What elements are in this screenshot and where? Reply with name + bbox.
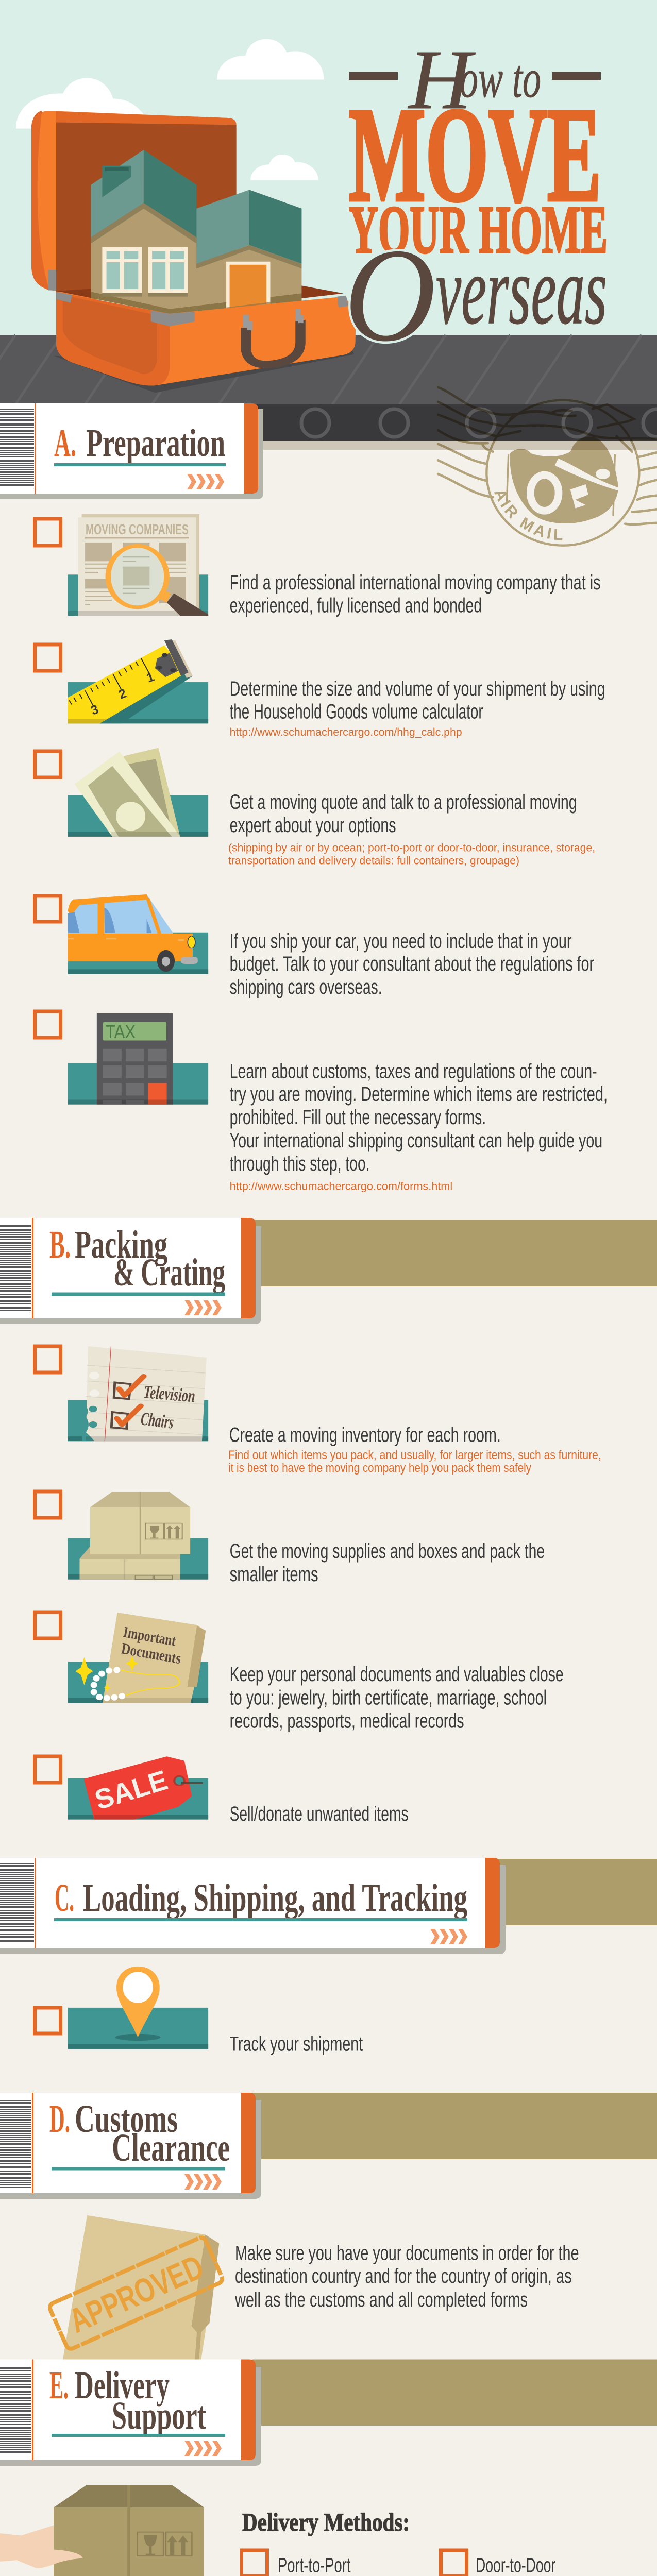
ticket body [0,1858,485,1948]
ticket body [0,2360,241,2460]
ticket shadow [0,2367,261,2466]
icon: car [68,894,208,974]
step text [230,677,605,738]
step text: well as the customs and all completed forms [234,2289,528,2311]
ticket shadow [0,2100,261,2199]
checkbox [35,1011,61,1038]
step text: the Household Goods volume calculator [230,701,483,723]
heading: A. Preparation: Preparation [86,421,225,465]
ticket tab [485,1858,500,1948]
section D ticket [0,2093,261,2199]
tape numbers: 2 [116,686,128,702]
tape numbers [89,670,156,718]
suitcase interior [56,285,344,314]
suitcase base [56,292,356,385]
title: Overseas: O [344,221,436,369]
step: sell or donate [35,1756,409,1825]
step: moving quote [35,748,595,867]
checkbox [35,1492,61,1518]
icon: document folder with pearls [68,1613,208,1703]
heading: D. Customs Clearance: D. [49,2097,70,2141]
barcode [0,2099,31,2188]
heading: E. Delivery Support [49,2364,206,2437]
step text: http://www.schumachercargo.com/forms.html [230,1181,452,1193]
heading: E. Delivery Support: E. [49,2364,69,2407]
checkbox [35,1756,61,1783]
barcode [0,1224,31,1313]
step text [230,1540,545,1586]
icon: checklist [68,1346,208,1441]
checkbox [35,519,61,546]
step: documents and valuables [35,1612,564,1732]
step text: transportation and delivery details: full containers, groupage) [228,855,519,867]
newspaper headline: MOVING COMPANIES [86,521,189,537]
section A ticket [0,403,263,499]
step text: shipping cars overseas. [230,976,382,998]
checkbox [35,896,61,922]
chevrons [187,474,224,489]
step text: records, passports, medical records [230,1709,464,1732]
checkbox [35,751,61,777]
ticket tab [241,2360,256,2460]
icon: newspaper and magnifier [68,514,208,616]
step text: smaller items [230,1563,318,1586]
ticket body [0,403,244,494]
step text: experienced, fully licensed and bonded [230,595,482,617]
title rules [349,72,601,80]
heading: B. Packing & Crating [49,1223,225,1294]
section E band [252,2360,657,2426]
ticket shadow [0,1226,261,1324]
checkbox [35,1346,61,1372]
checklist text: Chairs [140,1408,175,1433]
option: door-to-door [441,2550,555,2576]
suitcase with house [31,111,356,393]
step text: http://www.schumachercargo.com/hhg_calc.php [230,726,462,738]
suitcase shadow [54,350,354,393]
step: ship your car [35,894,594,998]
step text [230,1663,564,1732]
step text [230,1060,608,1193]
chevrons [184,1300,222,1315]
tape numbers: 1 [144,670,156,686]
step text: Create a moving inventory for each room. [229,1423,501,1446]
step text [228,791,595,867]
folder label: Documents [120,1640,182,1667]
heading: C. Loading, Shipping, and Tracking: C. [55,1876,74,1920]
approved stamp [48,2236,224,2350]
step text [234,2242,579,2311]
postmark stamp [437,386,657,547]
step text: through this step, too. [230,1153,370,1175]
barcode [0,2366,31,2454]
step text [230,930,594,998]
icon: location pin [68,1967,208,2049]
heading: E. Delivery Support: Delivery [75,2364,170,2407]
heading: C. Loading, Shipping, and Tracking: Loading, Shipping, and Tracking [83,1876,467,1920]
ticket body [0,2093,241,2193]
section B ticket [0,1218,261,1324]
hero scene: sky, clouds, conveyor [0,0,657,450]
title: How to: ow to [460,48,541,109]
step text: expert about your options [230,814,396,837]
heading: A. Preparation [54,421,225,465]
icon: approved folder [63,2215,219,2360]
section E ticket [0,2360,261,2466]
step: volume calculator [35,639,605,738]
ticket tab [241,2093,256,2193]
approved stamp: APPROVED [63,2247,209,2340]
title: Overseas [344,221,607,369]
postmark stamp: AIR MAIL [494,492,563,540]
icon: tape measure [68,639,208,723]
chevrons [430,1929,467,1944]
house [91,150,301,314]
step text: prohibited. Fill out the necessary forms. [230,1106,486,1129]
ticket shadow [0,1865,506,1954]
section D band [252,2093,657,2159]
folder label: Important [122,1623,177,1650]
step text: it is best to have the moving company help you pack them safely [228,1461,531,1475]
checklist text: Television [143,1381,196,1406]
delivery box with hand [0,2485,204,2576]
heading: D. Customs Clearance [49,2097,230,2170]
ticket body [0,1218,241,1318]
heading: B. Packing & Crating: Packing [75,1223,167,1266]
sale tag text: SALE [91,1765,171,1816]
barcode [0,409,34,488]
step: find moving company [35,514,601,617]
ticket tab [244,403,258,494]
delivery methods [241,2507,555,2576]
suitcase latches [48,270,348,326]
delivery methods heading: Delivery Methods: [242,2507,410,2536]
checkbox [35,2008,61,2033]
icon: cardboard boxes [68,1492,208,1580]
folder label [120,1623,182,1667]
step text: Track your shipment [230,2033,363,2056]
ticket shadow [0,409,263,499]
calculator display: TAX [106,1021,136,1042]
chevrons [184,2174,222,2190]
step text [230,571,601,617]
heading: C. Loading, Shipping, and Tracking [55,1876,467,1920]
section C band [495,1859,657,1925]
icon: calculator [68,1013,208,1105]
tape numbers: 3 [89,702,100,718]
title: How to: H [408,32,476,127]
icon: sale tag [68,1756,208,1820]
heading: D. Customs Clearance: Clearance [112,2126,230,2170]
step text: to you: jewelry, birth certificate, marriage, school [230,1687,547,1709]
section C ticket [0,1858,506,1954]
step text: Find out which items you pack, and usually, for larger items, such as furniture, [228,1448,601,1462]
suitcase lid [31,111,237,300]
ticket tab [241,1218,256,1318]
step text [228,1423,601,1475]
section B band [252,1220,657,1286]
step: moving supplies [35,1492,545,1586]
suitcase handle [243,309,304,365]
step: track shipment [35,1967,363,2056]
checkbox [35,1612,61,1638]
heading: E. Delivery Support: Support [112,2394,206,2437]
chevrons [184,2441,222,2456]
step text: Sell/donate unwanted items [230,1803,409,1825]
heading: B. Packing & Crating: B. [49,1223,71,1266]
barcode [0,1863,34,1943]
heading: B. Packing & Crating: & Crating [113,1251,225,1294]
checklist text [140,1381,196,1433]
step: inventory [35,1346,601,1475]
icon: money [68,748,208,837]
step text: (shipping by air or by ocean; port-to-port or door-to-door, insurance, storage, [228,842,595,854]
step: documents approved [48,2215,579,2360]
checkbox [35,645,61,671]
step: customs and taxes [35,1011,608,1193]
title: How to [408,32,541,127]
heading: A. Preparation: A. [54,421,76,465]
title [344,32,608,369]
heading: D. Customs Clearance: Customs [75,2097,178,2141]
option: port-to-port [241,2550,350,2576]
